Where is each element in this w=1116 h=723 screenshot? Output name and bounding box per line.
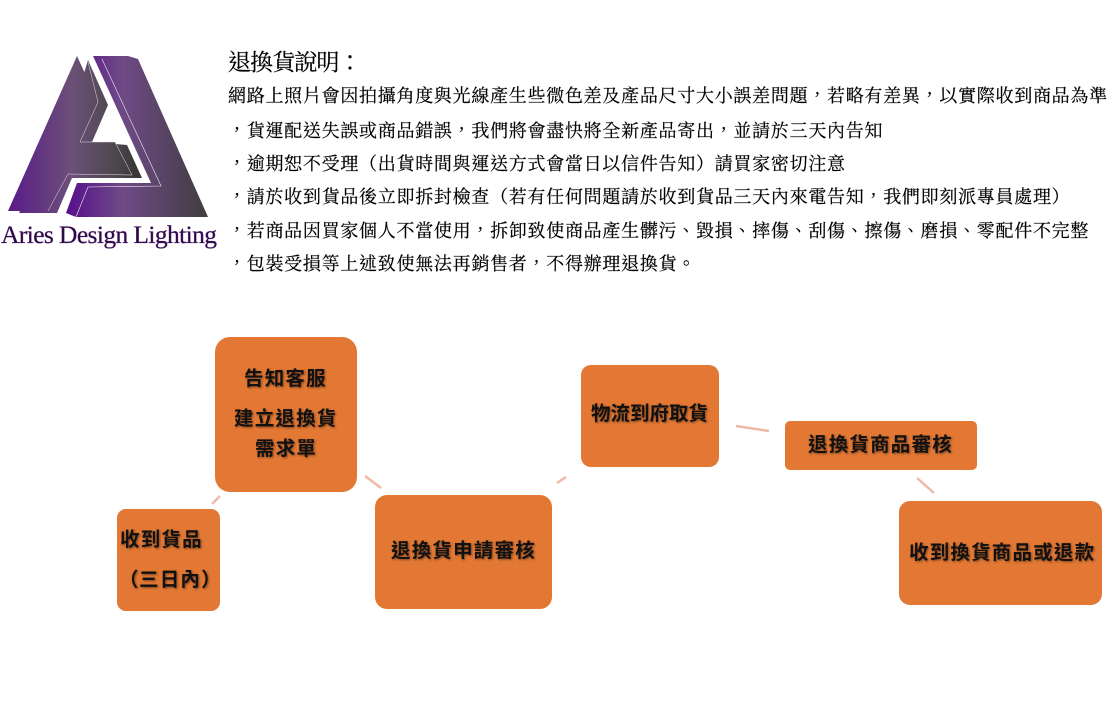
step: return application review: 退換貨申請審核	[391, 540, 536, 562]
step: return application review	[375, 495, 552, 609]
step: notify customer service: 告知客服	[244, 368, 327, 390]
text block: return policy: ，貨運配送失誤或商品錯誤，我們將會盡快將全新產品寄出，並請於三天內告知	[228, 120, 883, 140]
step: received goods: 收到貨品	[120, 529, 203, 551]
step: courier pickup: 物流到府取貨	[591, 403, 708, 425]
step: received goods	[117, 509, 220, 611]
step: receive replacement or refund	[899, 501, 1102, 605]
step: returned goods review: 退換貨商品審核	[808, 434, 953, 456]
step: courier pickup	[581, 365, 719, 467]
title: 退換貨說明：	[228, 50, 361, 75]
text block: return policy: 網路上照片會因拍攝角度與光線產生些微色差及產品尺寸大小誤差問題，若略有差異，以實際收到商品為準	[228, 86, 1108, 106]
text block: return policy	[228, 86, 1108, 274]
step: notify customer service	[215, 337, 357, 492]
step: notify customer service: 建立退換貨	[234, 408, 338, 430]
step: receive replacement or refund: 收到換貨商品或退款	[909, 542, 1095, 564]
logo: Aries Design Lighting	[1, 56, 217, 249]
text block: return policy: ，若商品因買家個人不當使用，拆卸致使商品產生髒污、毀損、摔傷、刮傷、擦傷、磨損、零配件不完整	[228, 220, 1089, 240]
step: notify customer service: 需求單	[255, 438, 317, 460]
step: returned goods review	[785, 421, 977, 470]
logo: Aries Design Lighting: Aries Design Lighting	[1, 220, 217, 249]
text block: return policy: ，請於收到貨品後立即拆封檢查（若有任何問題請於收到貨品三天內來電告知，我們即刻派專員處理）	[228, 186, 1070, 206]
text block: return policy: ，包裝受損等上述致使無法再銷售者，不得辦理退換貨。	[228, 254, 696, 274]
step: received goods: （三日內）	[119, 569, 222, 591]
text block: return policy: ，逾期恕不受理（出貨時間與運送方式會當日以信件告知）請買家密切注意	[228, 154, 846, 174]
